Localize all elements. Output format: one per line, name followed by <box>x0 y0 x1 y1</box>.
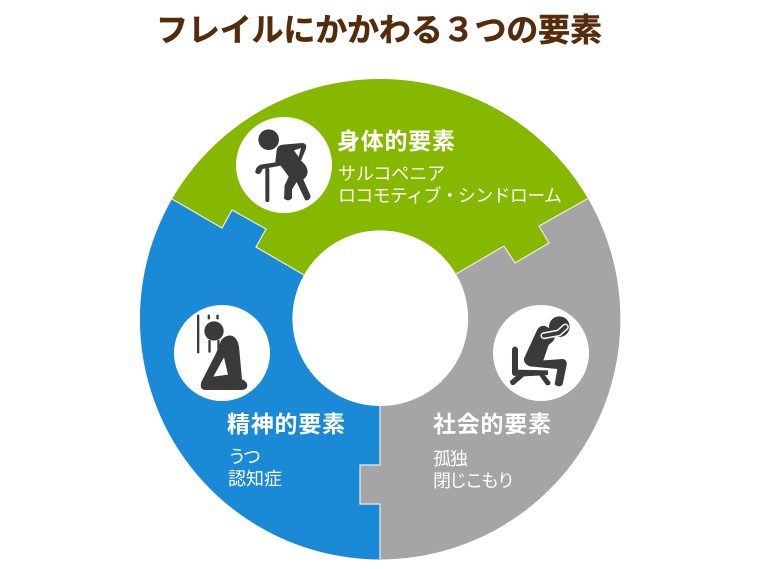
heading: social: 社会的要素 <box>433 411 551 437</box>
physical factor text: ロコモティブ・シンドローム <box>338 185 562 206</box>
mental factor text <box>227 411 345 489</box>
ring diagram <box>140 79 620 559</box>
heading: physical: 身体的要素 <box>337 128 455 154</box>
physical factor text <box>337 128 562 206</box>
panel: social segment <box>360 198 620 560</box>
heading: mental: 精神的要素 <box>227 411 345 437</box>
social factor text <box>433 411 551 491</box>
icon: depressed kneeling person <box>174 305 270 401</box>
panel: physical segment <box>172 79 588 275</box>
list: physical: サルコペニア <box>338 164 445 184</box>
mental factor text: 認知症 <box>228 469 282 489</box>
segment borders <box>172 198 588 559</box>
title: フレイルにかかわる３つの要素 <box>156 12 602 48</box>
panel: mental segment <box>140 199 380 560</box>
list: mental: うつ <box>228 447 261 467</box>
list: social: 孤独 <box>433 449 468 469</box>
icon: person sitting head in hands <box>493 305 589 401</box>
icon: person with cane <box>236 117 332 213</box>
social factor text: 閉じこもり <box>433 471 515 491</box>
